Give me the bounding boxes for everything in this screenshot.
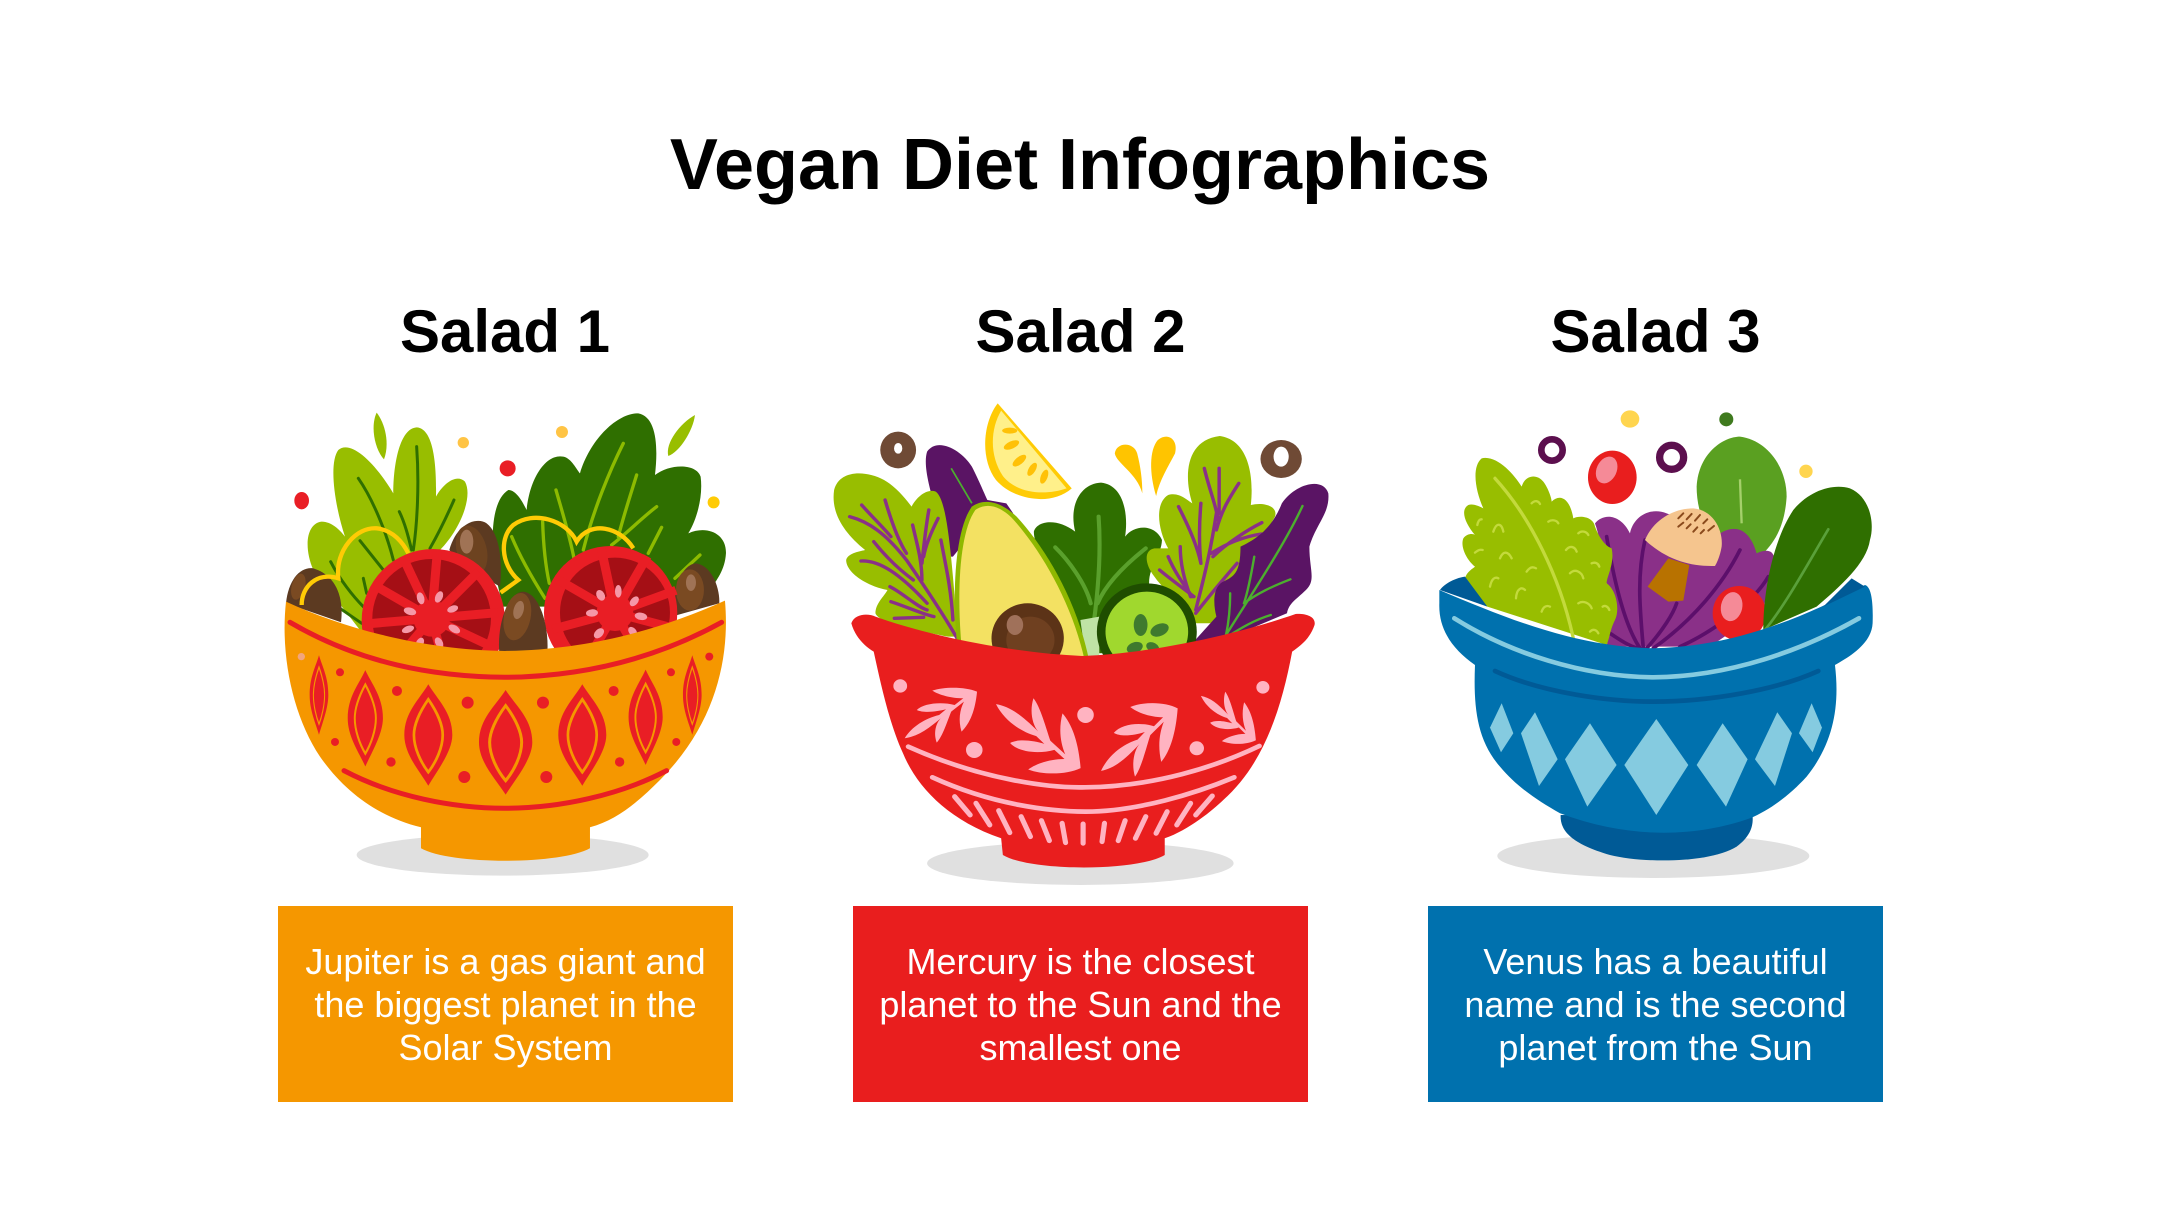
text box: salad 2: planet to the Sun and the — [879, 984, 1282, 1025]
text box: salad 3: Venus has a beautiful — [1483, 941, 1828, 982]
text box: salad 1: Jupiter is a gas giant and — [305, 941, 706, 982]
heading: salad 1: Salad 1 — [400, 298, 610, 365]
text box: salad 2: smallest one — [979, 1027, 1182, 1068]
panel: salad 3 — [1428, 298, 1883, 1102]
text box: salad 3: planet from the Sun — [1498, 1027, 1813, 1068]
illustration: blue salad bowl — [1439, 410, 1873, 878]
heading: salad 2: Salad 2 — [975, 298, 1186, 365]
illustration: red salad bowl — [834, 403, 1328, 885]
text box: salad 2: Mercury is the closest — [906, 941, 1255, 982]
panel: salad 1 — [278, 298, 733, 1102]
illustration: orange salad bowl — [285, 413, 726, 876]
text box: salad 1: the biggest planet in the — [314, 984, 697, 1025]
title: Vegan Diet Infographics — [670, 125, 1490, 205]
text box: salad 3: name and is the second — [1464, 984, 1847, 1025]
panel: salad 2 — [834, 298, 1328, 1102]
text box: salad 3 — [1428, 906, 1883, 1102]
text box: salad 1 — [278, 906, 733, 1102]
text box: salad 2 — [853, 906, 1308, 1102]
text box: salad 1: Solar System — [398, 1027, 613, 1068]
heading: salad 3: Salad 3 — [1550, 298, 1761, 365]
